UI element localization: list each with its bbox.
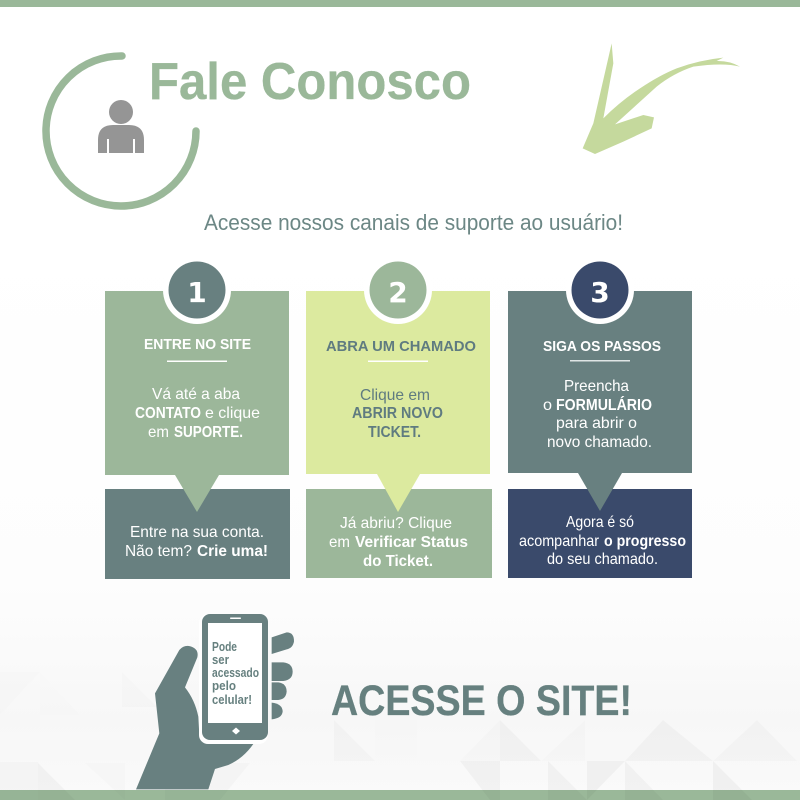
step 3 body: Preencha [564, 378, 629, 395]
step 1 body [135, 386, 260, 441]
title: Fale Conosco [149, 53, 471, 111]
step 3 number badge [566, 256, 634, 324]
step 1 heading: ENTRE NO SITE [144, 336, 251, 353]
phone screen text: celular! [212, 693, 252, 707]
panel: step 2 [306, 256, 492, 578]
step 1 note: Não tem? [125, 543, 192, 560]
step 3 card [508, 291, 692, 473]
step 2 lower box [306, 489, 492, 578]
step 1 body: e clique [205, 405, 260, 422]
step 2 body: TICKET. [368, 424, 421, 441]
step 3 body: o [543, 397, 552, 414]
step 1 body: CONTATO [135, 405, 201, 422]
step 3 note: do seu chamado. [547, 551, 658, 568]
step 2 body [352, 387, 443, 441]
step 2 body: ABRIR NOVO [352, 405, 443, 422]
step 3 note: acompanhar [519, 533, 600, 550]
step 2 heading: ABRA UM CHAMADO [326, 338, 476, 355]
hand [136, 632, 294, 789]
phone screen text [212, 640, 259, 707]
step 2 body: Clique em [360, 387, 430, 404]
call to action: ACESSE O SITE! [331, 677, 632, 725]
step 3 heading: SIGA OS PASSOS [543, 338, 661, 355]
step 1 body: em [148, 424, 169, 441]
step 3 pointer [578, 473, 622, 511]
phone screen text: acessado [212, 666, 259, 680]
step 1 note: Crie uma! [197, 543, 268, 560]
arrow [583, 43, 740, 154]
step 2 note [329, 515, 468, 570]
step 1 body: SUPORTE. [174, 424, 243, 441]
step 1 pointer [175, 475, 219, 512]
panel: step 1 [105, 256, 290, 579]
step 2 note: do Ticket. [363, 553, 433, 570]
icon: hand holding phone [136, 614, 294, 789]
step 1 card [105, 291, 289, 475]
step 1 body: Vá até a aba [152, 386, 240, 403]
step 1 number badge [163, 256, 231, 324]
phone screen text: ser [212, 653, 229, 667]
step 1 note [125, 524, 268, 560]
phone screen text: pelo [212, 679, 236, 693]
top bar [0, 0, 800, 7]
step 3 number badge: 3 [590, 276, 610, 309]
step 3 body [543, 378, 652, 451]
step 2 note: Verificar Status [355, 534, 468, 551]
subtitle: Acesse nossos canais de suporte ao usuário! [204, 210, 623, 235]
panel: step 3 [508, 256, 692, 578]
step 1 lower box [105, 489, 290, 579]
icon: user in circle [46, 56, 196, 206]
step 1 number badge: 1 [187, 276, 207, 309]
step 1 note: Entre na sua conta. [130, 524, 264, 541]
step 3 body: novo chamado. [547, 434, 652, 451]
step 2 number badge: 2 [388, 276, 408, 309]
step 2 note: Já abriu? Clique [340, 515, 452, 532]
step 3 body: para abrir o [556, 415, 637, 432]
phone screen text: Pode [212, 640, 237, 654]
step 2 note: em [329, 534, 350, 551]
step 3 body: FORMULÁRIO [556, 395, 652, 414]
step 3 lower box [508, 489, 692, 578]
step 3 note [519, 514, 686, 568]
bottom bar [0, 790, 800, 800]
step 2 pointer [377, 474, 420, 512]
step 2 card [306, 291, 490, 474]
step 3 note: Agora é só [566, 514, 634, 531]
phone [199, 614, 268, 744]
step 3 note: o progresso [604, 533, 686, 550]
step 2 number badge [364, 256, 432, 324]
